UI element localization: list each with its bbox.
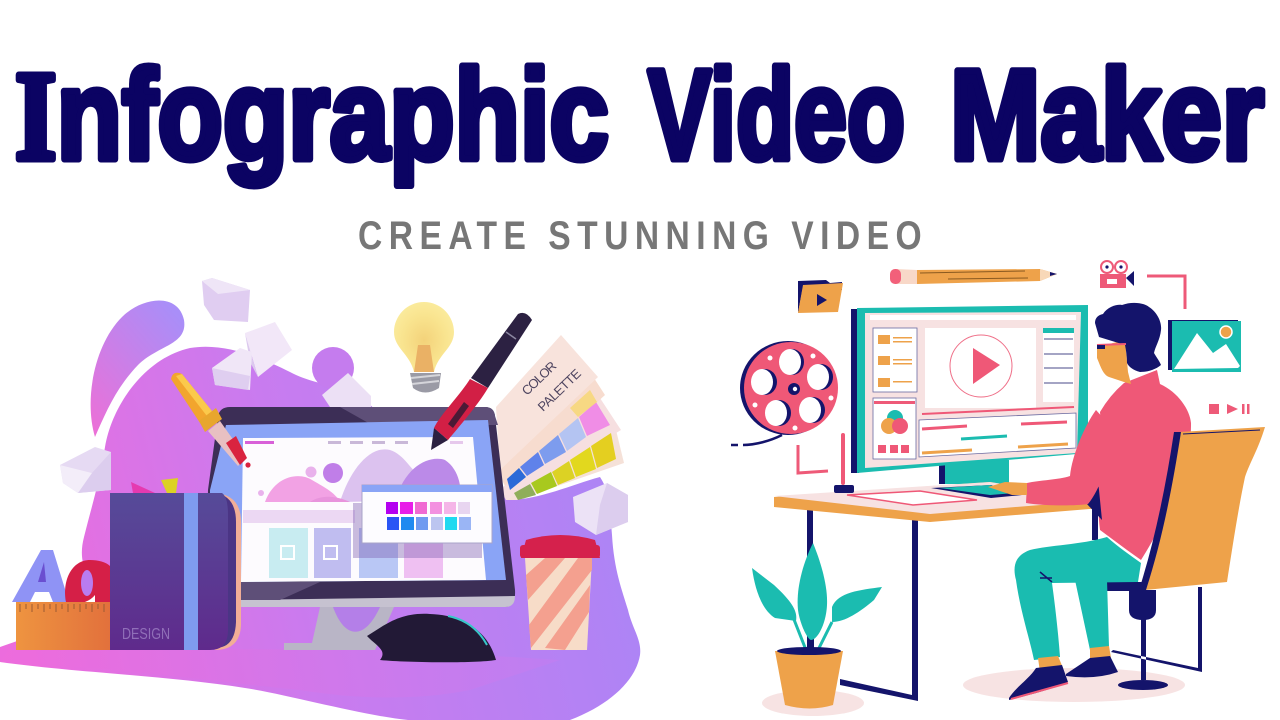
small blob — [312, 347, 354, 389]
subtitle: CREATE STUNNING VIDEO — [358, 213, 922, 258]
cubes — [60, 278, 628, 535]
person — [988, 303, 1191, 700]
video preview — [925, 328, 1036, 408]
coffee cup — [520, 535, 600, 650]
desktop monitor — [851, 305, 1088, 484]
arm shadow — [1086, 480, 1102, 520]
timeline — [919, 407, 1076, 457]
desk — [774, 433, 1102, 701]
book — [110, 493, 241, 650]
icon: light bulb — [394, 302, 454, 392]
screen header — [245, 441, 274, 444]
pencils behind book — [131, 482, 155, 493]
floor shadows — [963, 668, 1185, 702]
neck and face — [1097, 340, 1131, 384]
palette label — [519, 358, 584, 414]
hand — [988, 482, 1027, 495]
monitor — [205, 407, 515, 650]
title: Video — [648, 44, 905, 187]
ruler — [16, 602, 112, 650]
main purple blob — [0, 347, 640, 720]
swatches row — [514, 484, 536, 500]
chair base — [1077, 582, 1202, 690]
media controls — [1209, 404, 1250, 414]
chair back — [1139, 427, 1265, 590]
title: Infographic — [15, 44, 609, 187]
icon: stylus pen — [431, 313, 532, 450]
screen band and tiles — [243, 510, 355, 523]
purple drop blob — [91, 300, 184, 437]
icon: film reel — [731, 341, 838, 445]
monitor screen — [210, 420, 506, 582]
monitor stand — [939, 460, 1009, 484]
floor highlight — [0, 648, 560, 698]
thigh — [1015, 537, 1141, 660]
icon: folder — [798, 280, 843, 313]
illustration: design workspace — [0, 278, 640, 720]
glasses — [1097, 344, 1126, 345]
monitor body — [205, 407, 515, 607]
ankle — [1038, 656, 1063, 672]
front shoe — [1009, 665, 1068, 700]
palette card — [496, 335, 598, 470]
book: DESIGN — [122, 626, 170, 643]
color palette fan — [496, 335, 624, 500]
letters Aa on ruler — [12, 550, 112, 650]
illustration: video editor at desk — [731, 261, 1265, 716]
palette label: COLOR — [519, 358, 559, 398]
screen chart hills — [323, 463, 343, 483]
hair — [1095, 303, 1161, 372]
pen holder — [841, 433, 845, 485]
keyboard — [931, 485, 1022, 498]
icon: image frame — [1168, 320, 1241, 372]
arm — [1026, 410, 1114, 505]
right list panel — [1043, 328, 1074, 402]
title — [15, 44, 1264, 187]
colour panel — [873, 398, 916, 459]
back shoe — [1066, 656, 1118, 677]
torso — [1098, 370, 1191, 560]
back leg — [1075, 580, 1109, 650]
icon: pencil — [890, 269, 1057, 284]
icon: color dropper — [171, 373, 251, 468]
monitor stand — [284, 607, 394, 650]
palette label: PALETTE — [535, 366, 584, 414]
icon: film camera — [1100, 261, 1134, 288]
corner marks — [1147, 276, 1185, 309]
color dialog — [362, 485, 492, 543]
mouse — [367, 614, 496, 662]
desk tablet — [847, 491, 977, 505]
file panel — [873, 328, 917, 392]
pot — [775, 651, 843, 708]
plant — [752, 543, 882, 708]
